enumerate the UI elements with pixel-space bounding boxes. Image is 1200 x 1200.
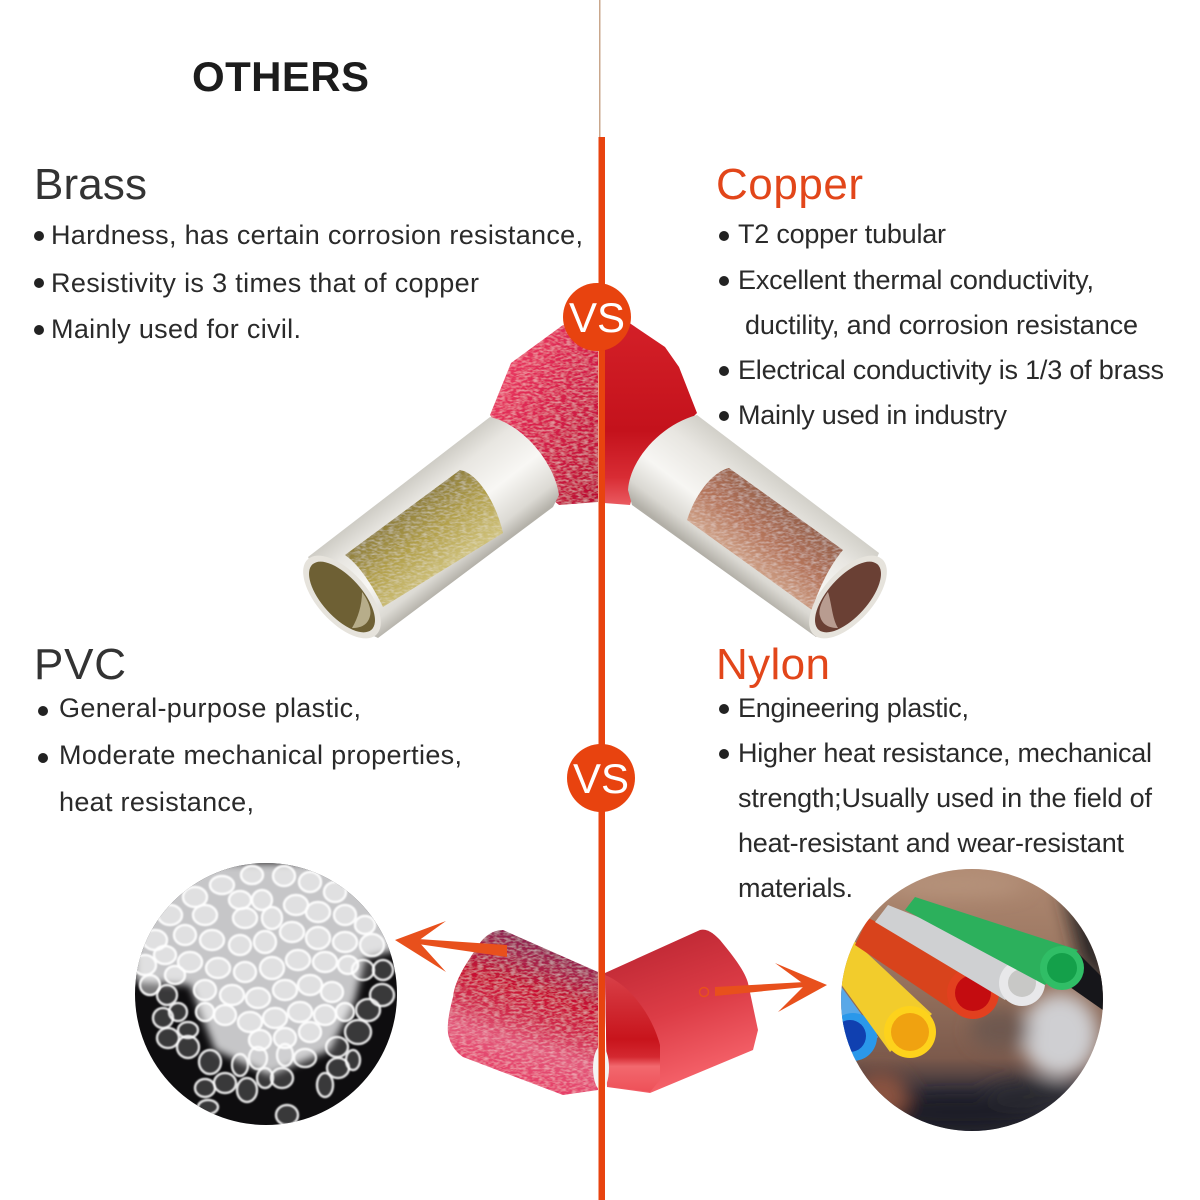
VS badge top (563, 283, 631, 351)
blue tube (841, 987, 878, 1061)
black tube (1071, 952, 1103, 1010)
heading: brass: Brass (34, 160, 147, 209)
arrow: to nylon tubes (700, 963, 827, 1012)
left tube opening (289, 542, 395, 652)
PVC bullet list: General-purpose plastic, (59, 693, 361, 723)
nylon bullet list: strength;Usually used in the field of (738, 783, 1152, 813)
inner facet (605, 975, 660, 1092)
green tube (905, 897, 1084, 990)
blurred background (852, 873, 1110, 1130)
nylon bullet list: heat-resistant and wear-resistant (738, 828, 1124, 858)
copper bullet list: ductility, and corrosion resistance (745, 310, 1138, 340)
nylon bullet list: Higher heat resistance, mechanical (738, 738, 1152, 768)
nylon bullet list: Engineering plastic, (738, 693, 969, 723)
panel: PVC (34, 640, 462, 817)
brass bullet list: Mainly used for civil. (51, 314, 301, 344)
VS badge bottom: VS (573, 755, 629, 802)
panel: nylon (716, 640, 1152, 903)
copper bullet list (719, 219, 1164, 430)
panel: copper (716, 160, 1164, 430)
center divider line (598, 0, 605, 1200)
arrow: to PVC pellets (395, 921, 507, 972)
brass bullet list: Resistivity is 3 times that of copper (51, 268, 479, 298)
right silver tube (628, 415, 879, 637)
ferrule illustration (289, 320, 901, 652)
brass bullet list (34, 220, 583, 344)
brass strands (345, 470, 503, 607)
title: OTHERS (192, 53, 369, 100)
brass bullet list: Hardness, has certain corrosion resistance, (51, 220, 583, 250)
copper bullet list: Excellent thermal conductivity, (738, 265, 1094, 295)
nylon bullet list (719, 693, 1152, 903)
left red collar (490, 320, 598, 505)
VS badge bottom (567, 744, 635, 812)
white tube (875, 905, 1045, 1006)
photo: PVC pellets (134, 863, 397, 1125)
PVC bullet list: Moderate mechanical properties, (59, 740, 462, 770)
heading: nylon: Nylon (716, 640, 830, 689)
copper bullet list: Electrical conductivity is 1/3 of brass (738, 355, 1164, 385)
heading: PVC: PVC (34, 640, 126, 689)
yellow tube (838, 940, 936, 1058)
VS badge top: VS (569, 294, 625, 341)
bottom right red collar (605, 930, 758, 1093)
right tube opening (795, 542, 901, 652)
red tube (855, 918, 999, 1019)
photo: nylon tubes (841, 869, 1103, 1131)
copper strands (687, 468, 843, 610)
PVC bullet list (38, 693, 462, 817)
copper bullet list: T2 copper tubular (738, 219, 946, 249)
PVC bullet list: heat resistance, (59, 787, 254, 817)
left silver tube (308, 417, 559, 638)
bottom left red collar (448, 930, 598, 1095)
nylon bullet list: materials. (738, 873, 853, 903)
heading: copper: Copper (716, 160, 863, 209)
panel: brass (34, 160, 583, 344)
bottom silver notch (593, 1046, 609, 1090)
copper bullet list: Mainly used in industry (738, 400, 1008, 430)
right red collar (604, 320, 697, 505)
